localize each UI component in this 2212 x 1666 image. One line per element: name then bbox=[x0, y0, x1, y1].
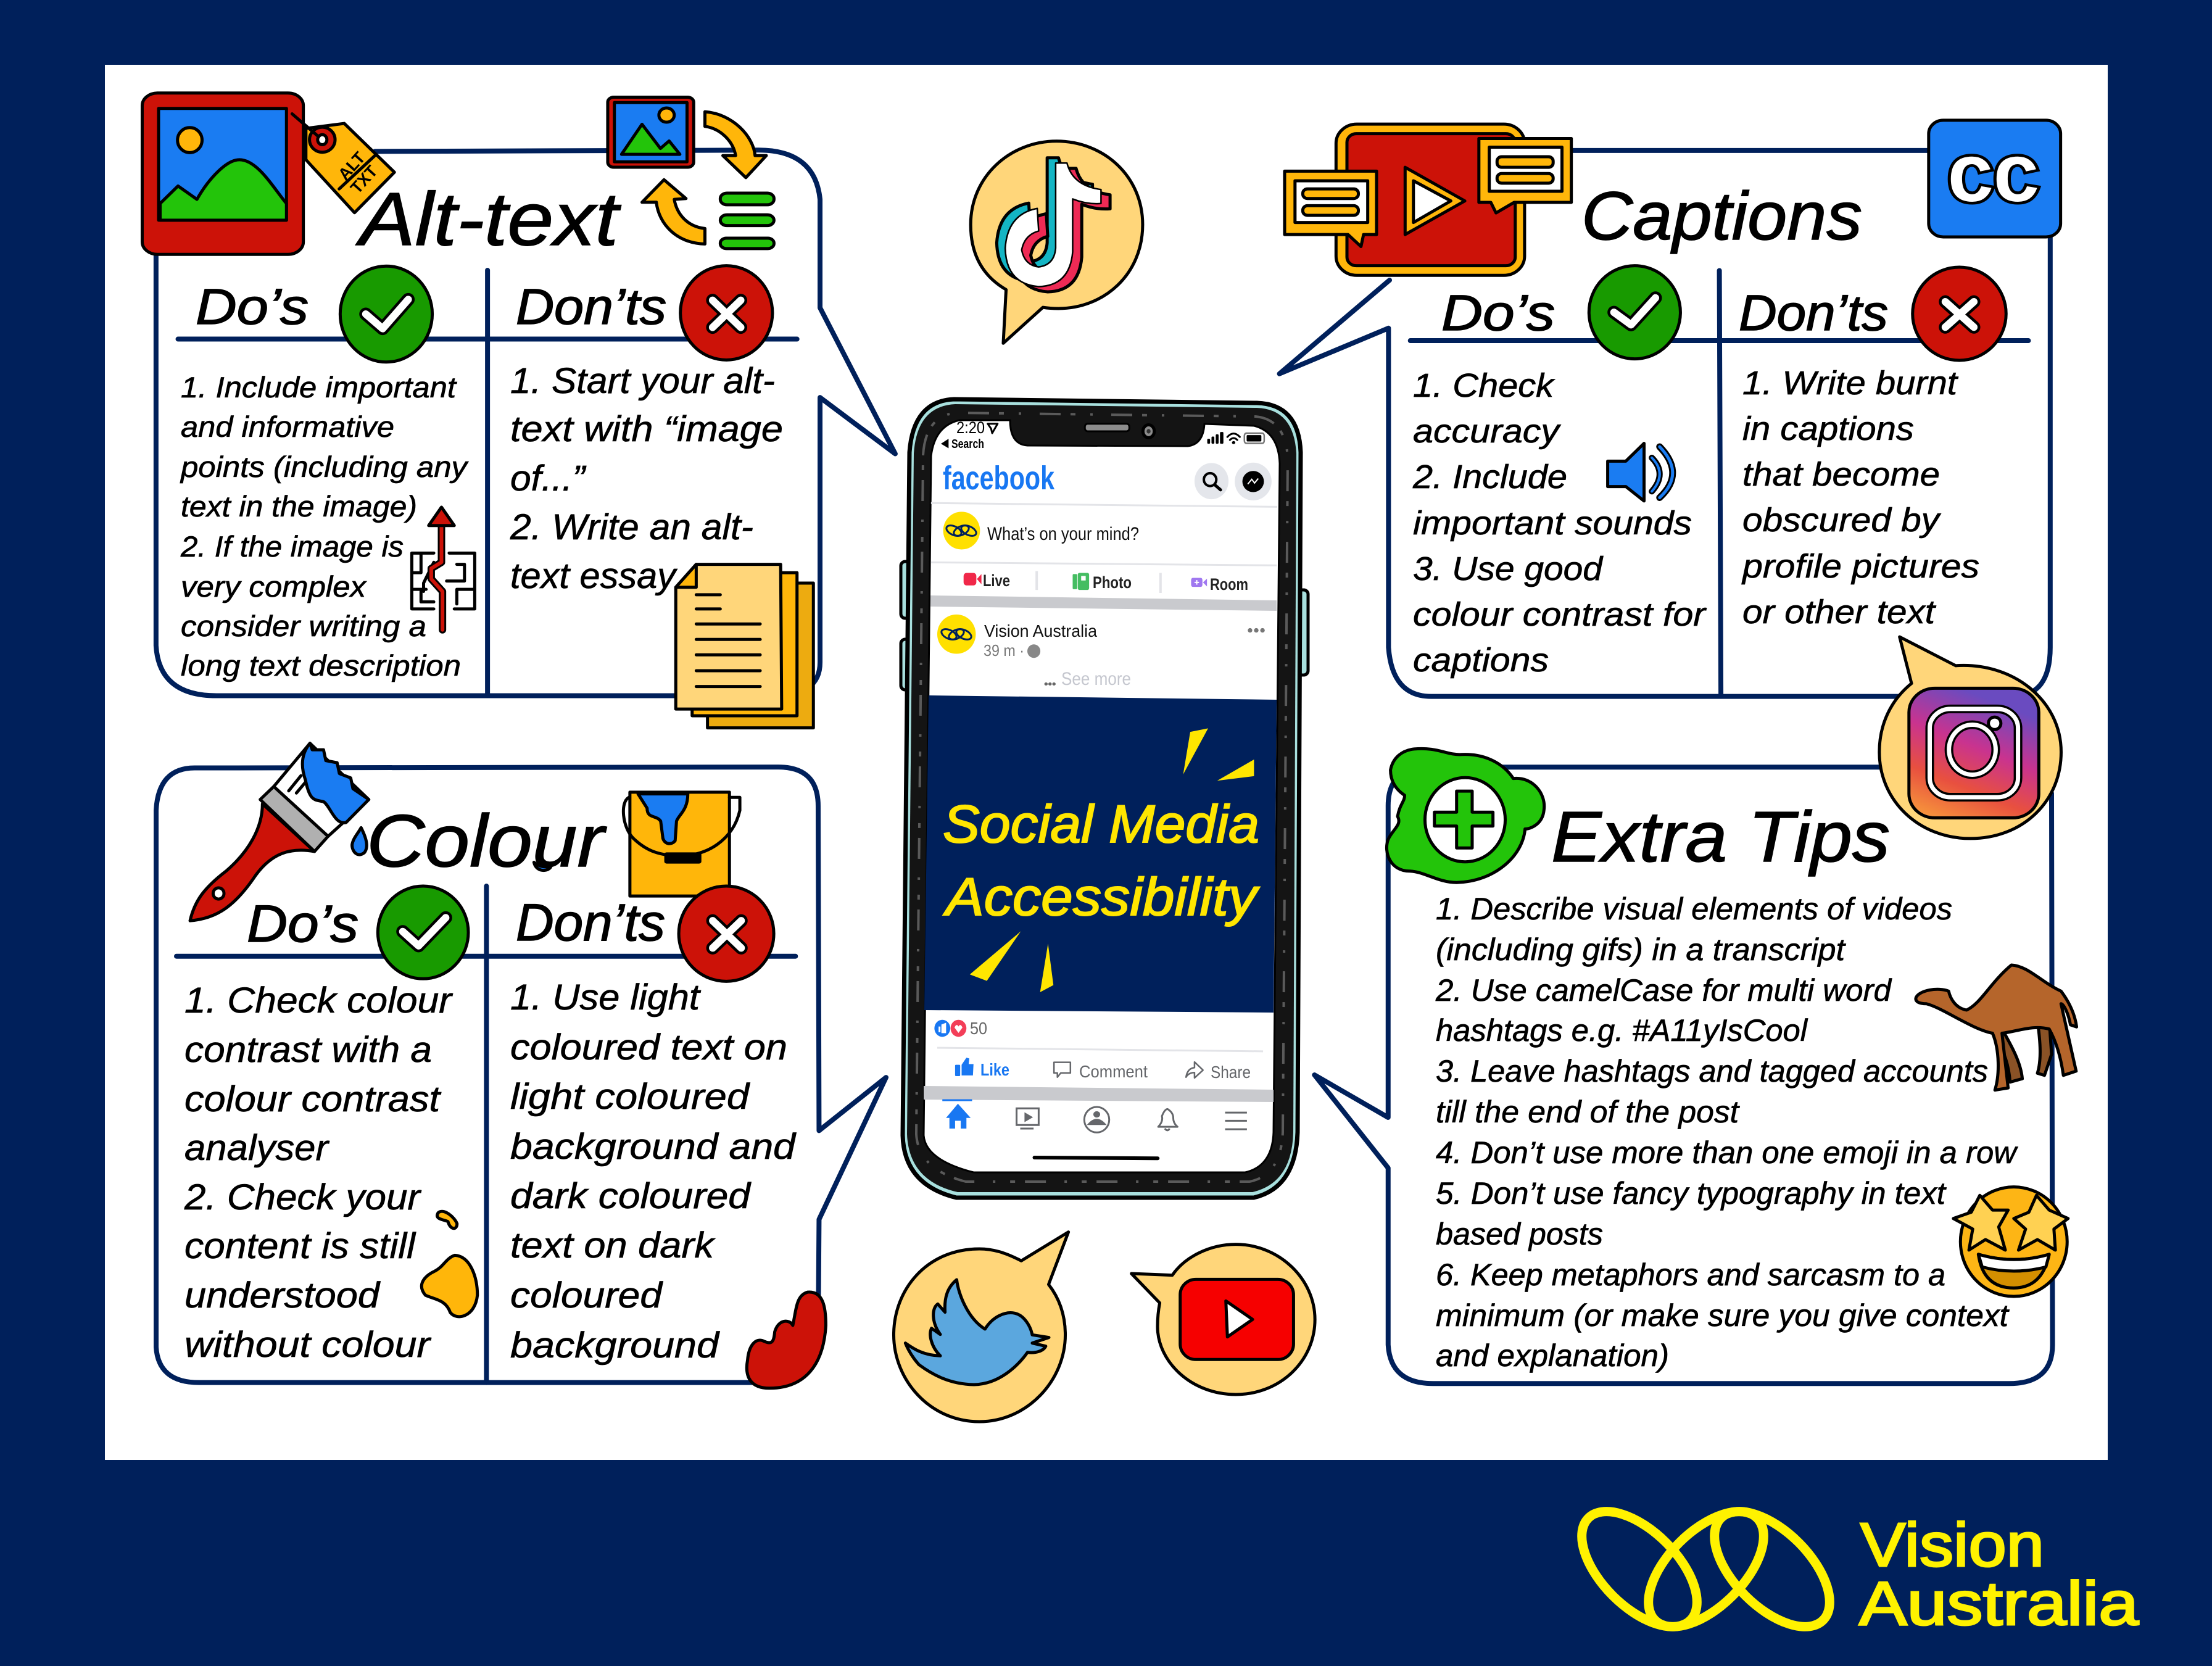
icon: red cross bbox=[681, 266, 773, 360]
colour don'ts heading: Don’ts bbox=[516, 893, 665, 951]
colour don'ts list bbox=[510, 977, 797, 1366]
phone body bbox=[903, 399, 1301, 1198]
title: social media accessibility: Accessibility bbox=[943, 868, 1260, 927]
icon: instagram speech bubble bbox=[1879, 637, 2061, 839]
colour do's list: 2. Check your bbox=[184, 1177, 422, 1217]
post time: 39 m · bbox=[984, 641, 1024, 660]
colour don'ts list: text on dark bbox=[510, 1225, 716, 1266]
colour speech bubble outline bbox=[156, 767, 886, 1383]
captions don'ts list: profile pictures bbox=[1741, 548, 1979, 585]
captions do's list bbox=[1412, 367, 1707, 679]
extra tips list: minimum (or make sure you give context bbox=[1436, 1298, 2010, 1333]
CC badge letters: CC bbox=[1948, 146, 2039, 222]
reactions bbox=[934, 1020, 1263, 1078]
captions do's list: 1. Check bbox=[1413, 367, 1555, 404]
title: social media accessibility bbox=[943, 795, 1260, 927]
alt-text do's list: 2. If the image is bbox=[180, 530, 404, 563]
globe and more menu bbox=[1027, 628, 1265, 686]
colour do's heading: Do’s bbox=[247, 895, 358, 953]
like comment share labels: Like bbox=[980, 1060, 1009, 1079]
icon: image with alt text tag bbox=[142, 93, 394, 254]
panel: alt-text bbox=[142, 93, 895, 728]
post author: Vision Australia bbox=[984, 621, 1097, 640]
tab bar separator bbox=[924, 1086, 1274, 1102]
icon: video with captions bbox=[1285, 124, 1572, 275]
status bar icons bbox=[941, 424, 1264, 448]
extra tips list: till the end of the post bbox=[1436, 1095, 1740, 1129]
colour do's list bbox=[184, 980, 454, 1365]
colour do's list: without colour bbox=[184, 1325, 432, 1365]
icon: green tick bbox=[378, 886, 468, 979]
icon: youtube speech bubble bbox=[1132, 1245, 1315, 1395]
alt-text don'ts list: text essay bbox=[510, 556, 677, 596]
extra tips list: 1. Describe visual elements of videos bbox=[1436, 892, 1952, 926]
colour don'ts list: light coloured bbox=[510, 1077, 750, 1117]
alt text tag label: TXT bbox=[347, 162, 381, 197]
tab bar icons bbox=[942, 1100, 1247, 1158]
composer actions: Room bbox=[1210, 575, 1248, 594]
vision australia avatar logos bbox=[940, 523, 978, 642]
icon: red cross bbox=[1913, 267, 2006, 360]
captions don'ts list: 1. Write burnt bbox=[1742, 365, 1958, 402]
extra tips list bbox=[1435, 892, 2018, 1373]
icon: maze with arrow bbox=[412, 507, 474, 630]
icon: green tick bbox=[340, 266, 433, 362]
extra tips list: 2. Use camelCase for multi word bbox=[1435, 973, 1892, 1008]
alt-text do's heading: Do’s bbox=[196, 279, 309, 335]
captions do's list: 2. Include bbox=[1412, 458, 1567, 495]
alt-text do's list bbox=[180, 371, 469, 682]
alt-text heading: Alt-text bbox=[355, 177, 622, 261]
icon: paint bucket bbox=[623, 792, 740, 896]
colour don'ts list: 1. Use light bbox=[510, 977, 702, 1017]
alt-text don'ts list: text with “image bbox=[510, 409, 783, 449]
colour heading: Colour bbox=[367, 800, 607, 882]
captions do's heading: Do’s bbox=[1441, 285, 1555, 341]
colour do's list: analyser bbox=[184, 1128, 330, 1168]
icon: red cross bbox=[679, 886, 774, 981]
icon: red paint splat bbox=[747, 1292, 826, 1388]
icon: speaker bbox=[1608, 444, 1673, 501]
colour do's list: contrast with a bbox=[184, 1030, 432, 1070]
icon: camel bbox=[1916, 965, 2077, 1090]
captions don'ts heading: Don’ts bbox=[1739, 285, 1888, 341]
composer actions: Live bbox=[983, 571, 1010, 590]
search and messenger buttons bbox=[1195, 463, 1272, 500]
alt-text do's list: 1. Include important bbox=[181, 371, 457, 404]
logo wordmark: Vision bbox=[1860, 1511, 2044, 1580]
status bar time: 2:20 bbox=[956, 418, 985, 437]
captions do's list: captions bbox=[1413, 642, 1549, 679]
captions do's list: important sounds bbox=[1413, 505, 1692, 542]
alt-text don'ts list: of...” bbox=[510, 458, 587, 499]
phone screen bbox=[924, 420, 1280, 1172]
like comment share labels: Comment bbox=[1079, 1062, 1148, 1081]
colour do's list: understood bbox=[184, 1275, 381, 1316]
extra tips speech bubble outline bbox=[1314, 767, 2053, 1383]
icon: paint brush bbox=[190, 744, 369, 921]
see more link: See more bbox=[1061, 669, 1131, 689]
alt-text don'ts list: 1. Start your alt- bbox=[510, 361, 775, 401]
alt-text don'ts list: 2. Write an alt- bbox=[510, 507, 753, 547]
captions don'ts list: or other text bbox=[1742, 594, 1936, 631]
colour don'ts list: dark coloured bbox=[510, 1176, 752, 1216]
icon: CC badge background bbox=[1929, 120, 2061, 237]
captions don'ts list: in captions bbox=[1742, 410, 1914, 447]
icon: stack of documents bbox=[676, 565, 813, 728]
phone side buttons bbox=[901, 562, 1308, 690]
like comment share labels bbox=[980, 1060, 1251, 1082]
logo wordmark: Australia bbox=[1859, 1569, 2139, 1638]
extra tips list: and explanation) bbox=[1436, 1338, 1669, 1373]
alt-text do's list: consider writing a bbox=[181, 610, 426, 642]
captions do's list: 3. Use good bbox=[1413, 550, 1604, 587]
speaker and camera bbox=[1085, 424, 1154, 437]
icon: blue paint drops bbox=[352, 827, 551, 871]
captions don'ts list bbox=[1741, 365, 1979, 631]
alt-text do's list: text in the image) bbox=[181, 490, 417, 523]
icon: yellow paint splats bbox=[421, 1211, 478, 1317]
extra tips list: 5. Don’t use fancy typography in text bbox=[1436, 1176, 1947, 1211]
vision australia logo bbox=[1562, 1491, 2139, 1647]
panel: colour bbox=[156, 744, 886, 1388]
alt text tag label: ALT bbox=[334, 148, 369, 184]
alt-text don'ts heading: Don’ts bbox=[516, 279, 666, 335]
icon: image to text conversion bbox=[608, 97, 774, 249]
composer prompt: What’s on your mind? bbox=[987, 524, 1139, 544]
title: social media accessibility: Social Media bbox=[943, 795, 1259, 854]
post image background bbox=[924, 695, 1277, 1013]
colour do's list: 1. Check colour bbox=[184, 980, 454, 1021]
status bar back label: Search bbox=[951, 437, 984, 451]
extra tips list: 6. Keep metaphors and sarcasm to a bbox=[1436, 1258, 1945, 1292]
alt-text don'ts list bbox=[510, 361, 783, 596]
reaction count: 50 bbox=[970, 1019, 987, 1038]
colour do's list: content is still bbox=[184, 1226, 416, 1266]
colour don'ts list: coloured bbox=[510, 1275, 663, 1316]
phone bbox=[901, 399, 1308, 1198]
colour do's list: colour contrast bbox=[184, 1079, 442, 1119]
composer and dividers bbox=[931, 503, 1277, 654]
alt-text do's list: and informative bbox=[181, 410, 394, 443]
colour don'ts list: coloured text on bbox=[510, 1027, 787, 1067]
alt-text speech bubble outline bbox=[156, 150, 895, 696]
alt-text do's list: long text description bbox=[181, 649, 461, 682]
yellow accent rays bbox=[970, 728, 1254, 992]
icon: twitter speech bubble bbox=[893, 1232, 1069, 1422]
extra tips list: hashtags e.g. #A11yIsCool bbox=[1436, 1013, 1808, 1048]
like comment share labels: Share bbox=[1211, 1063, 1251, 1082]
extra tips list: (including gifs) in a transcript bbox=[1436, 932, 1846, 967]
alt text tag label bbox=[334, 148, 381, 197]
extra tips heading: Extra Tips bbox=[1551, 797, 1890, 877]
captions speech bubble outline bbox=[1280, 151, 2050, 697]
icon: tiktok speech bubble bbox=[971, 141, 1143, 343]
facebook wordmark: facebook bbox=[943, 460, 1055, 497]
captions do's list: colour contrast for bbox=[1413, 596, 1707, 633]
white content panel bbox=[105, 65, 2108, 1460]
alt-text do's list: points (including any bbox=[180, 450, 469, 483]
logo mark bbox=[1562, 1491, 1850, 1647]
captions don'ts list: that become bbox=[1742, 456, 1940, 493]
extra tips list: 3. Leave hashtags and tagged accounts bbox=[1436, 1054, 1988, 1088]
panel: extra tips bbox=[1314, 748, 2077, 1383]
icon: green plus badge bbox=[1386, 748, 1544, 882]
colour don'ts list: background and bbox=[510, 1127, 797, 1167]
extra tips list: based posts bbox=[1436, 1217, 1603, 1251]
icon: green tick bbox=[1589, 266, 1680, 359]
composer actions: Photo bbox=[1093, 573, 1132, 592]
colour don'ts list: background bbox=[510, 1325, 720, 1366]
separator bar bbox=[930, 595, 1277, 611]
logo wordmark bbox=[1859, 1511, 2139, 1638]
extra tips list: 4. Don’t use more than one emoji in a row bbox=[1436, 1135, 2018, 1170]
captions do's list: accuracy bbox=[1413, 413, 1561, 450]
composer actions bbox=[983, 571, 1248, 594]
phone bezel bbox=[907, 404, 1296, 1192]
captions don'ts list: obscured by bbox=[1742, 502, 1941, 539]
panel: captions bbox=[1280, 120, 2061, 697]
captions heading: Captions bbox=[1581, 178, 1862, 254]
alt-text do's list: very complex bbox=[181, 570, 367, 603]
icon: star eyes emoji bbox=[1953, 1187, 2068, 1296]
